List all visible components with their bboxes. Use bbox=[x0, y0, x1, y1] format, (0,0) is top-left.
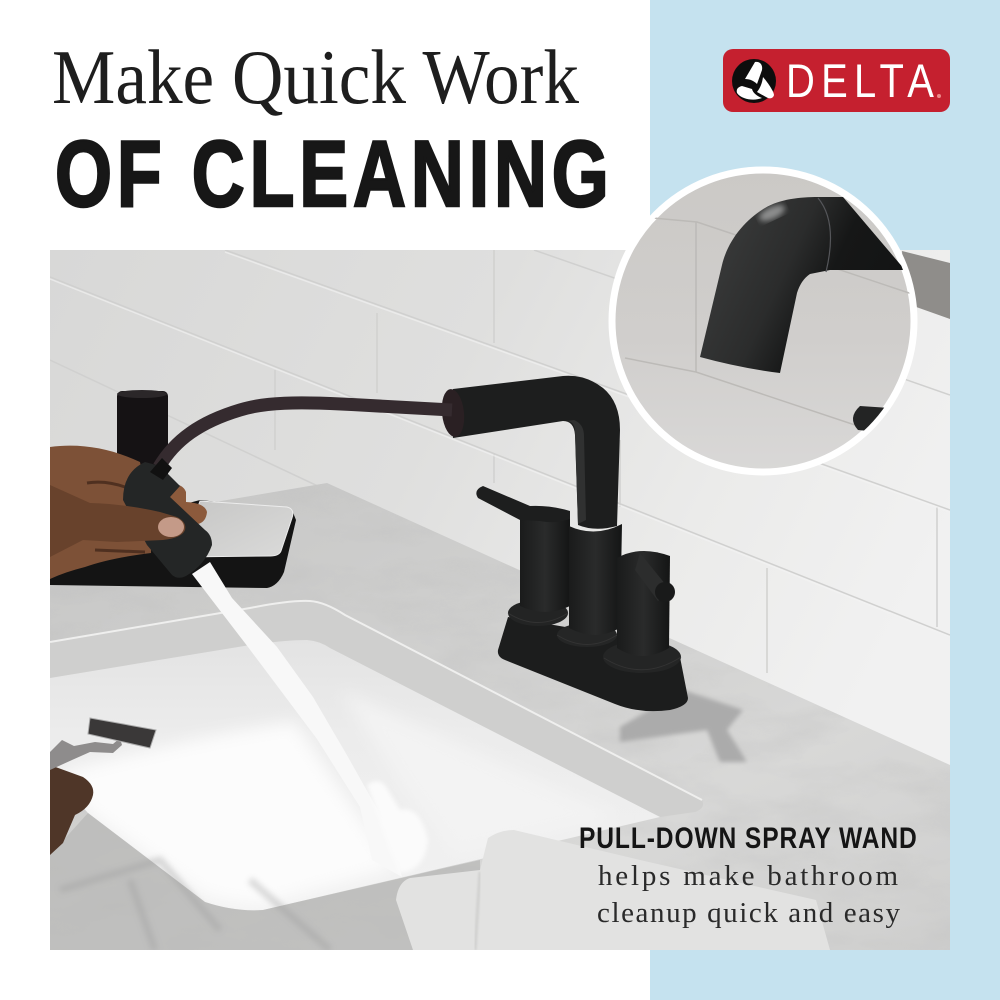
spray water bbox=[192, 562, 376, 820]
callout line two: cleanup quick and easy bbox=[597, 897, 900, 929]
logo: Delta bbox=[723, 49, 950, 112]
center body bbox=[569, 524, 622, 635]
background: white panel bbox=[0, 0, 650, 1000]
left collar bbox=[508, 602, 568, 624]
logo: Delta: DELTA bbox=[786, 56, 934, 108]
title bbox=[52, 34, 609, 226]
right lever bbox=[651, 568, 664, 600]
back fingers bbox=[170, 485, 207, 524]
palm bbox=[50, 446, 152, 579]
faucet base bbox=[498, 617, 688, 711]
bottle bbox=[117, 390, 168, 474]
lower marble veins bbox=[60, 860, 330, 950]
lever end bbox=[853, 406, 890, 432]
inset circle: spout close-up bbox=[612, 170, 930, 472]
wand connector bbox=[150, 458, 172, 480]
towels bbox=[396, 830, 830, 950]
counter in front of basin bbox=[50, 813, 480, 950]
lower hand bbox=[50, 765, 93, 855]
basin right side bbox=[380, 723, 381, 724]
wall tiles bbox=[50, 250, 950, 765]
spout highlight bbox=[757, 202, 787, 224]
tray bbox=[50, 500, 296, 588]
finger fold bbox=[87, 482, 145, 552]
razor bbox=[50, 718, 156, 770]
title line: bold: OF CLEANING bbox=[55, 121, 609, 226]
spout seam bbox=[818, 198, 830, 272]
basin floor bbox=[74, 724, 380, 898]
water splash bbox=[367, 781, 428, 873]
metal strip bbox=[902, 251, 950, 319]
callout line one: helps make bathroom bbox=[598, 860, 898, 892]
hose bbox=[159, 403, 452, 467]
counter top bbox=[50, 480, 950, 950]
left handle bbox=[520, 519, 570, 608]
spout bbox=[453, 376, 620, 529]
right collar bbox=[604, 646, 682, 670]
thumbnail bbox=[158, 517, 184, 537]
callout heading: PULL-DOWN SPRAY WAND bbox=[579, 821, 917, 855]
faucet shadow bbox=[620, 690, 747, 762]
sink bevel bbox=[632, 798, 702, 816]
spout mouth bbox=[442, 389, 464, 437]
background: light blue panel bbox=[650, 0, 1000, 1000]
title line: serif: Make Quick Work bbox=[52, 34, 579, 120]
left lever bbox=[476, 486, 570, 522]
center collar bbox=[557, 626, 617, 647]
thumb bbox=[50, 485, 185, 557]
callout: pull-down spray wand bbox=[579, 821, 917, 929]
faucet bbox=[440, 376, 688, 711]
hand bbox=[50, 446, 212, 579]
spray wand bbox=[123, 462, 212, 578]
photo: bathroom scene bbox=[50, 250, 950, 950]
right handle bbox=[617, 551, 670, 656]
sink basin bbox=[50, 640, 660, 910]
close-up spout bbox=[700, 197, 905, 373]
